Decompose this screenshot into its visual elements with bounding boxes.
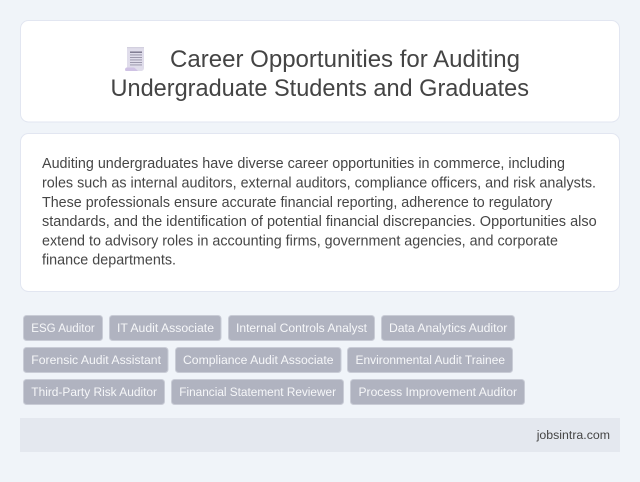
text block: description: finance departments. <box>42 253 176 269</box>
footer bar <box>20 418 620 452</box>
title: Career Opportunities for Auditing <box>170 46 520 73</box>
panel: description <box>20 134 620 292</box>
footer text: jobsintra.com <box>536 428 610 442</box>
text block: description: roles such as internal auditors, external auditors, compliance officers, and risk analysts. <box>42 175 596 191</box>
tag: Compliance Audit Associate <box>176 348 341 372</box>
text block: description: standards, and the identification of potential financial discrepancies. Opportunities also <box>42 214 597 230</box>
title: Undergraduate Students and Graduates <box>110 75 529 102</box>
title <box>110 46 529 102</box>
tag: Internal Controls Analyst: Internal Controls Analyst <box>236 321 368 335</box>
tag: IT Audit Associate <box>110 316 221 340</box>
tag list <box>24 316 524 404</box>
panel: header <box>20 20 620 122</box>
tag: Forensic Audit Assistant <box>24 348 168 372</box>
tag: ESG Auditor: ESG Auditor <box>31 321 95 335</box>
tag: ESG Auditor <box>24 316 102 340</box>
text block: description <box>42 156 597 269</box>
tag: Data Analytics Auditor <box>382 316 514 340</box>
tag: Third-Party Risk Auditor: Third-Party Risk Auditor <box>31 385 157 399</box>
tag: Compliance Audit Associate: Compliance Audit Associate <box>183 353 334 367</box>
tag: Financial Statement Reviewer <box>172 380 344 404</box>
text block: description: Auditing undergraduates have diverse career opportunities in commerce, including <box>42 156 565 172</box>
tag: Environmental Audit Trainee: Environmental Audit Trainee <box>356 353 505 367</box>
tag: Internal Controls Analyst <box>228 316 374 340</box>
tag: Forensic Audit Assistant: Forensic Audit Assistant <box>31 353 162 367</box>
tag: Financial Statement Reviewer: Financial Statement Reviewer <box>179 385 336 399</box>
tag: IT Audit Associate: IT Audit Associate <box>117 321 214 335</box>
text block: description: These professionals ensure accurate financial reporting, adherence to regulatory <box>42 195 553 211</box>
text block: description: extend to advisory roles in accounting firms, government agencies, and corporate <box>42 234 558 250</box>
tag: Environmental Audit Trainee <box>348 348 512 372</box>
icon: paper receipt scroll <box>125 47 144 71</box>
tag: Data Analytics Auditor: Data Analytics Auditor <box>389 321 507 335</box>
tag: Third-Party Risk Auditor <box>24 380 164 404</box>
tag: Process Improvement Auditor: Process Improvement Auditor <box>358 385 517 399</box>
tag: Process Improvement Auditor <box>350 380 524 404</box>
